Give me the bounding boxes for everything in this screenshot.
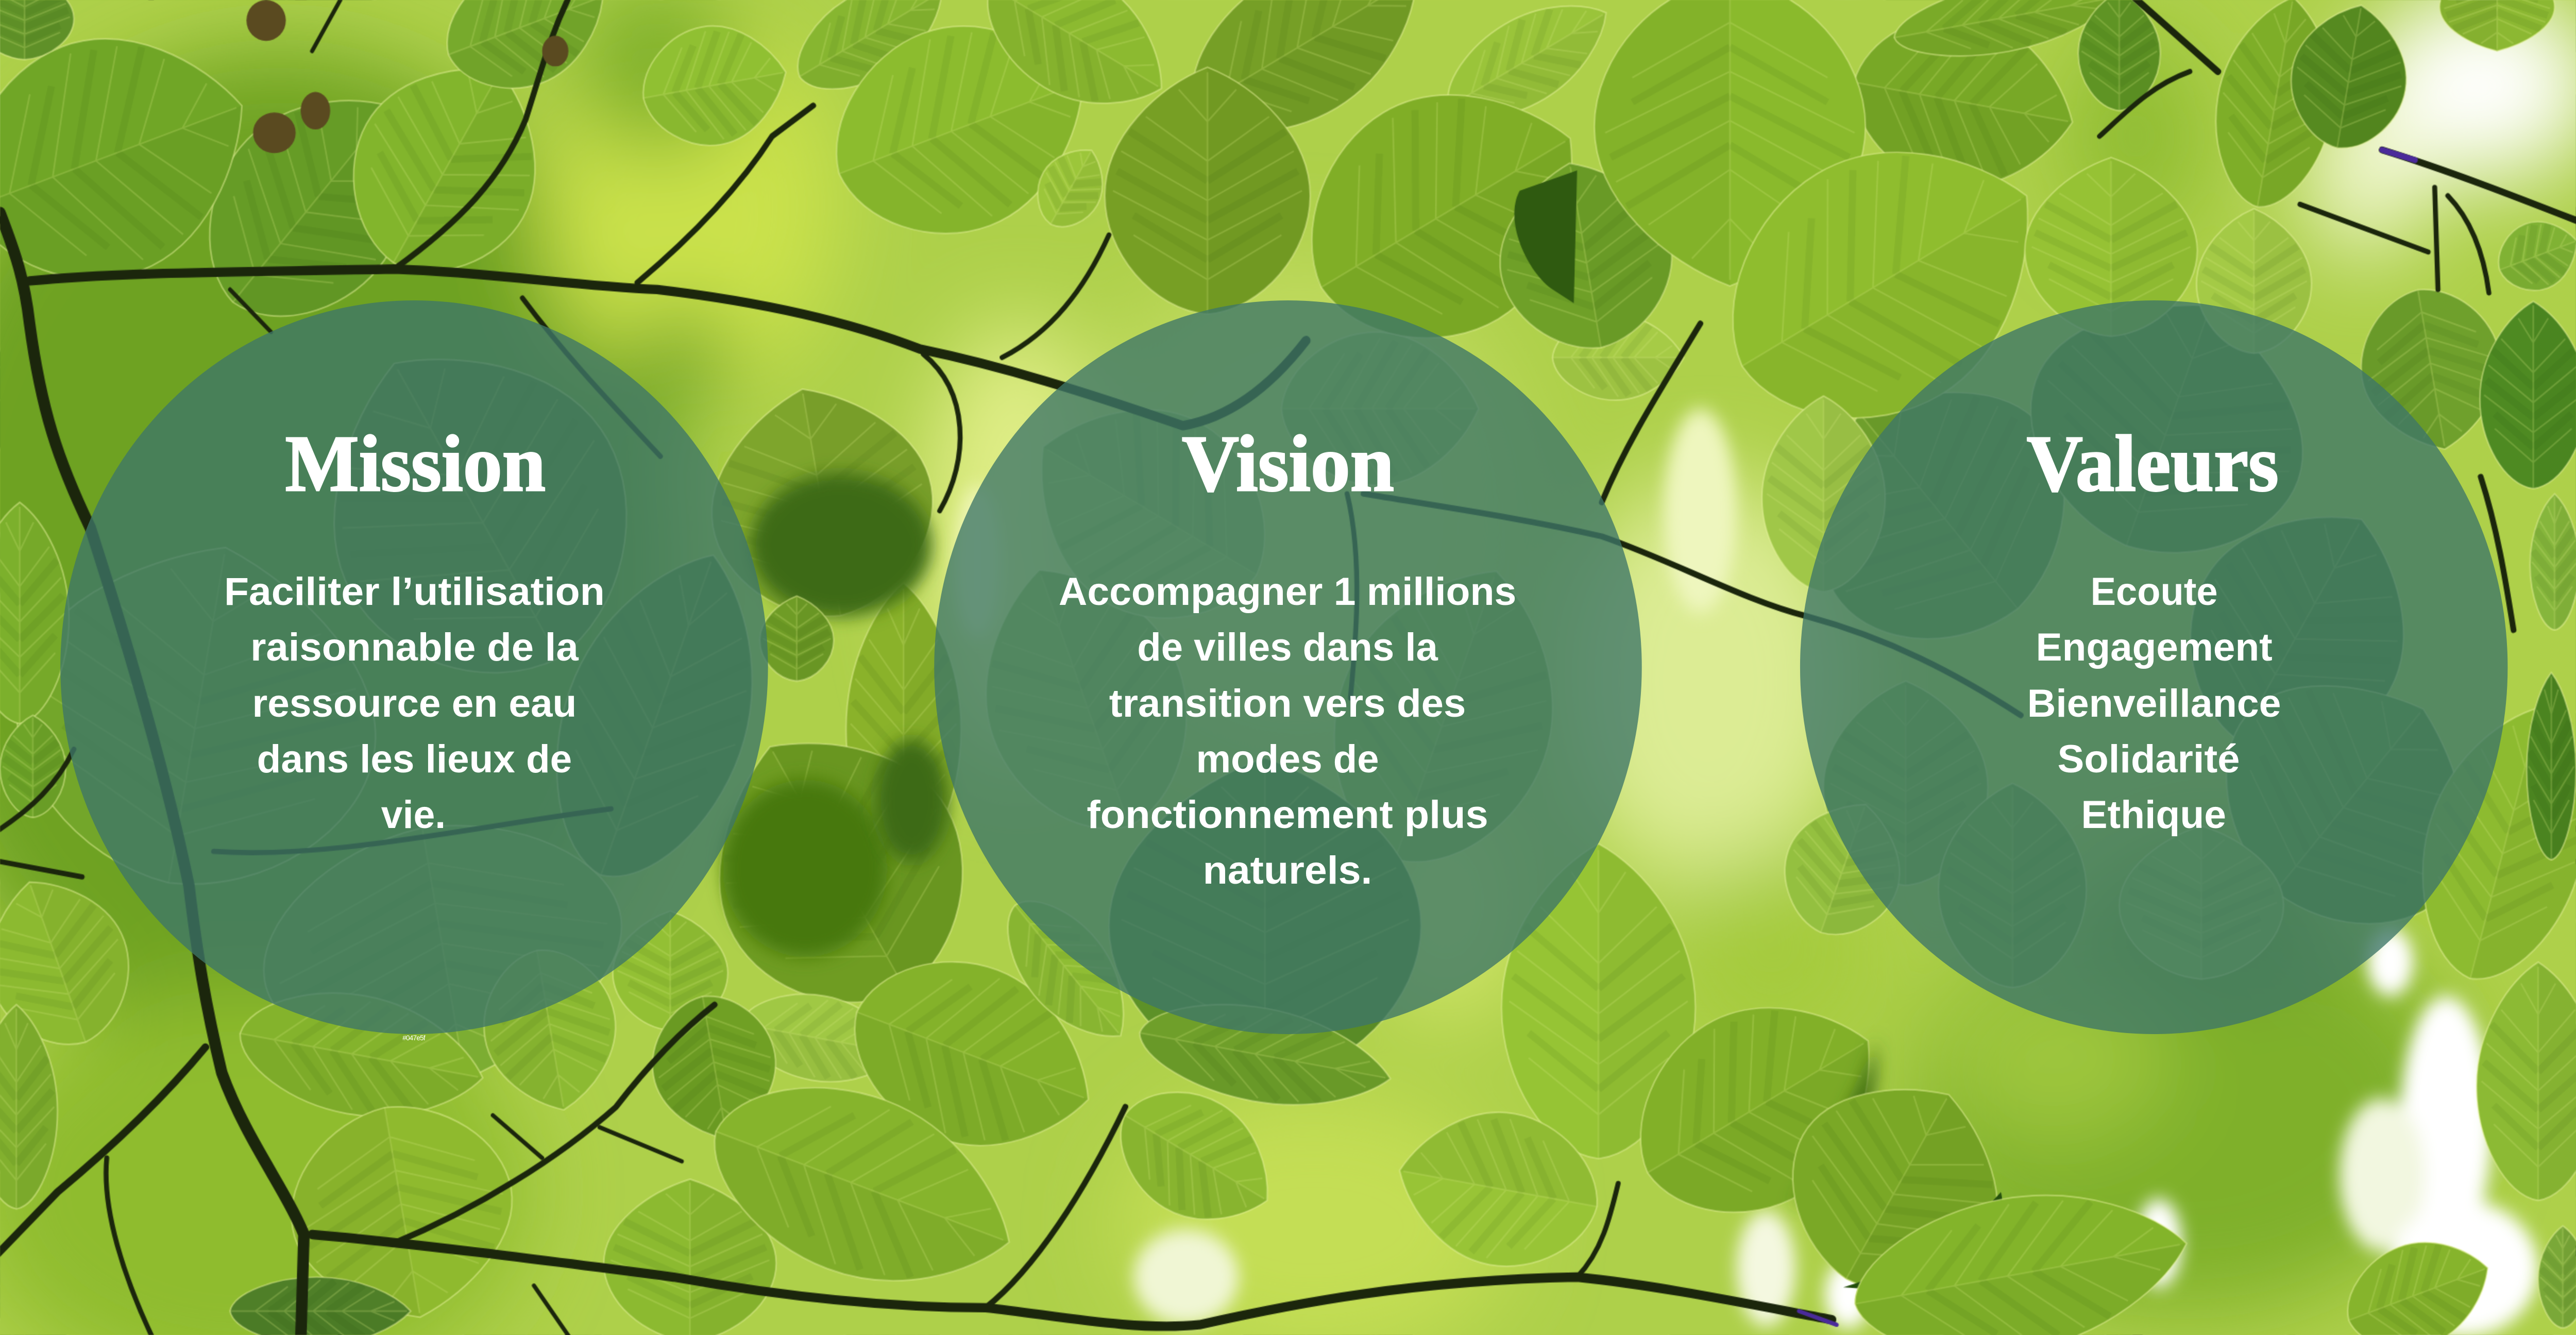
small colour code caption: #047e5f [402, 1034, 426, 1042]
text block: vision statement: naturels. [1203, 848, 1372, 892]
text block: mission statement [224, 569, 605, 836]
text block: list of values: Ethique [2081, 792, 2226, 836]
text block: vision statement: modes de [1196, 737, 1379, 781]
panel: valeurs circle [1800, 300, 2507, 1034]
text block: list of values: Bienveillance [2027, 681, 2281, 725]
heading: Mission: Mission [285, 419, 546, 509]
text block: mission statement: ressource en eau [252, 681, 577, 725]
text block: vision statement: transition vers des [1109, 681, 1466, 725]
heading: Valeurs: Valeurs [2027, 419, 2279, 509]
text block: vision statement [1059, 569, 1516, 892]
text block: vision statement: fonctionnement plus [1087, 792, 1488, 836]
text block: vision statement: Accompagner 1 millions [1059, 569, 1516, 613]
text block: mission statement: raisonnable de la [250, 625, 579, 669]
text block: mission statement: Faciliter l’utilisation [224, 569, 605, 613]
text block: list of values: Ecoute [2091, 569, 2218, 613]
text block: list of values: Engagement [2036, 625, 2273, 669]
panel: vision circle [934, 300, 1642, 1034]
heading: Vision: Vision [1182, 419, 1394, 509]
text block: list of values: Solidarité [2058, 737, 2240, 781]
text block: list of values [2027, 569, 2281, 836]
panel: mission circle [60, 300, 768, 1034]
text block: mission statement: dans les lieux de [257, 737, 572, 781]
text block: mission statement: vie. [381, 792, 446, 836]
text block: vision statement: de villes dans la [1137, 625, 1438, 669]
